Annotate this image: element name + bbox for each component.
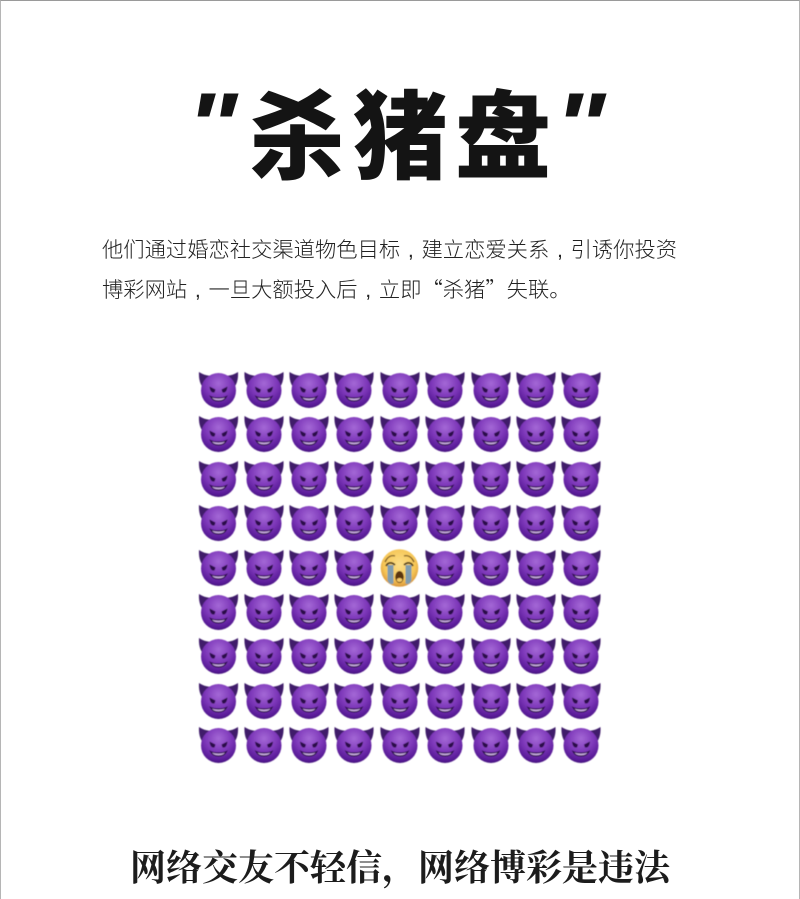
body text: 博彩网站 一旦大额投入后 立即“杀猪”失联。 — [102, 273, 571, 304]
footer slogan: 网络交友不轻信，网络博彩是违法 — [130, 840, 670, 891]
devil row 4 — [199, 505, 601, 541]
title: " — [186, 75, 237, 177]
icon: crying face — [381, 549, 418, 587]
body text — [102, 233, 677, 304]
devil row 3 — [199, 461, 601, 497]
body text: , — [365, 278, 371, 302]
body text: , — [557, 238, 563, 262]
devil row 7 — [199, 638, 601, 674]
title: " — [554, 75, 605, 177]
devil row 9 — [199, 727, 601, 763]
body text: , — [195, 278, 201, 302]
devil row 1 — [199, 372, 601, 408]
body text: 他们通过婚恋社交渠道物色目标 建立恋爱关系 引诱你投资 — [102, 233, 677, 264]
title: 杀猪盘 — [249, 60, 558, 199]
devil row 5 — [199, 550, 601, 586]
body text: , — [408, 238, 414, 262]
devil row 6 — [199, 594, 601, 630]
devil row 8 — [199, 683, 601, 719]
devil row 2 — [199, 416, 601, 452]
